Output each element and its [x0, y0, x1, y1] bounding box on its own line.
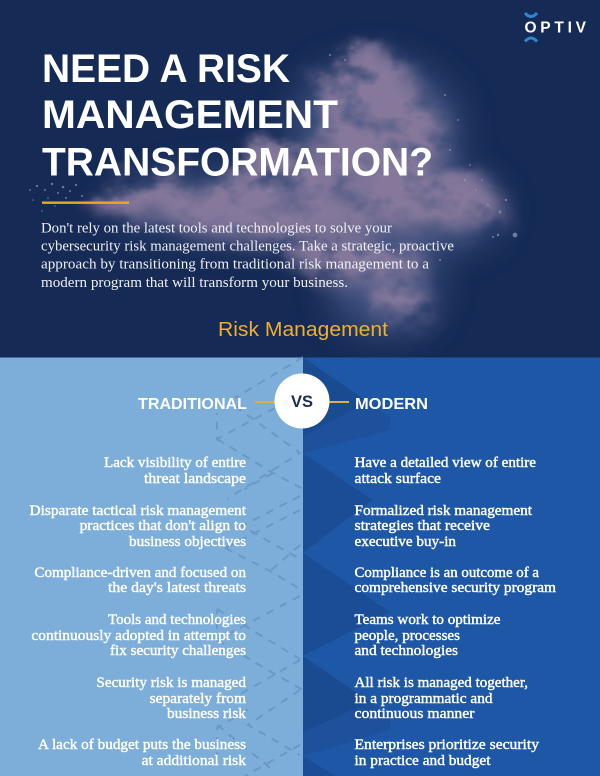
traditional item 3: the day's latest threats [108, 580, 246, 596]
intro paragraph: Don't rely on the latest tools and technologies to solve your [41, 220, 392, 236]
title [42, 47, 433, 184]
chevron pattern [303, 358, 390, 776]
traditional item 6: A lack of budget puts the business [38, 737, 246, 753]
modern item 3: comprehensive security program [354, 580, 557, 596]
dashed zigzag pattern [217, 357, 303, 776]
intro paragraph [41, 220, 454, 291]
heading: Risk Management: Risk Management [218, 318, 388, 341]
speckles [29, 47, 517, 261]
traditional item 1: threat landscape [144, 471, 246, 487]
modern item 2: executive buy-in [354, 534, 457, 550]
heading: traditional: TRADITIONAL [138, 396, 247, 413]
vs connector right [329, 401, 349, 403]
smoke powder burst [29, 47, 517, 335]
traditional item 4 [31, 612, 246, 659]
vs connector left [255, 401, 275, 403]
traditional item 6: at additional risk [142, 753, 247, 769]
vs badge [274, 374, 330, 428]
modern item 6: Enterprises prioritize security [354, 737, 540, 753]
traditional item 5: separately from [150, 691, 247, 707]
title: TRANSFORMATION? [42, 140, 433, 184]
traditional item 5 [96, 675, 247, 722]
vs badge: VS [291, 393, 313, 411]
modern item 3: Compliance is an outcome of a [354, 565, 540, 581]
traditional item 4: fix security challenges [110, 643, 246, 659]
panel: modern [303, 358, 600, 776]
modern item 1: Have a detailed view of entire [354, 455, 536, 471]
header background [0, 0, 600, 358]
traditional item 2: practices that don't align to [80, 518, 246, 534]
modern item 5: in a programmatic and [354, 691, 493, 707]
logo wordmark: OPTIV [524, 20, 587, 36]
title underline [42, 202, 129, 204]
traditional item 4: Tools and technologies [108, 612, 246, 628]
intro paragraph: cybersecurity risk management challenges. Take a strategic, proactive [41, 238, 454, 254]
heading: modern: MODERN [355, 396, 428, 413]
modern item 1: attack surface [354, 471, 441, 487]
traditional item 1 [104, 455, 246, 487]
modern item 2: Formalized risk management [354, 503, 532, 519]
traditional item 2 [30, 503, 246, 550]
traditional item 3: Compliance-driven and focused on [34, 565, 247, 581]
modern item 4: people, processes [354, 628, 460, 644]
icon: logo top chevron [525, 13, 537, 16]
traditional item 2: Disparate tactical risk management [30, 503, 246, 519]
modern item 4: and technologies [354, 643, 458, 659]
modern item 6 [354, 737, 540, 769]
traditional item 2: business objectives [129, 534, 246, 550]
logo: Optiv [524, 13, 587, 42]
traditional item 1: Lack visibility of entire [104, 455, 246, 471]
modern item 6: in practice and budget [354, 753, 490, 769]
modern item 1 [354, 455, 536, 487]
intro paragraph: approach by transitioning from traditional risk management to a [41, 256, 429, 272]
title: NEED A RISK [42, 47, 290, 91]
modern item 3 [354, 565, 557, 596]
modern item 2 [354, 503, 532, 550]
icon: logo bottom chevron [525, 38, 537, 42]
traditional item 5: Security risk is managed [96, 675, 247, 691]
traditional item 5: business risk [167, 706, 247, 722]
modern item 4 [354, 612, 500, 659]
traditional item 6 [38, 737, 247, 769]
intro paragraph: modern program that will transform your business. [41, 275, 348, 291]
panel: traditional [0, 357, 303, 776]
modern item 5: All risk is managed together, [354, 675, 528, 691]
title: MANAGEMENT [42, 93, 338, 137]
modern item 5 [354, 675, 528, 722]
modern item 4: Teams work to optimize [354, 612, 500, 628]
modern item 5: continuous manner [354, 706, 475, 722]
traditional item 4: continuously adopted in attempt to [31, 628, 246, 644]
traditional item 3 [34, 565, 247, 596]
modern item 2: strategies that receive [354, 518, 490, 534]
